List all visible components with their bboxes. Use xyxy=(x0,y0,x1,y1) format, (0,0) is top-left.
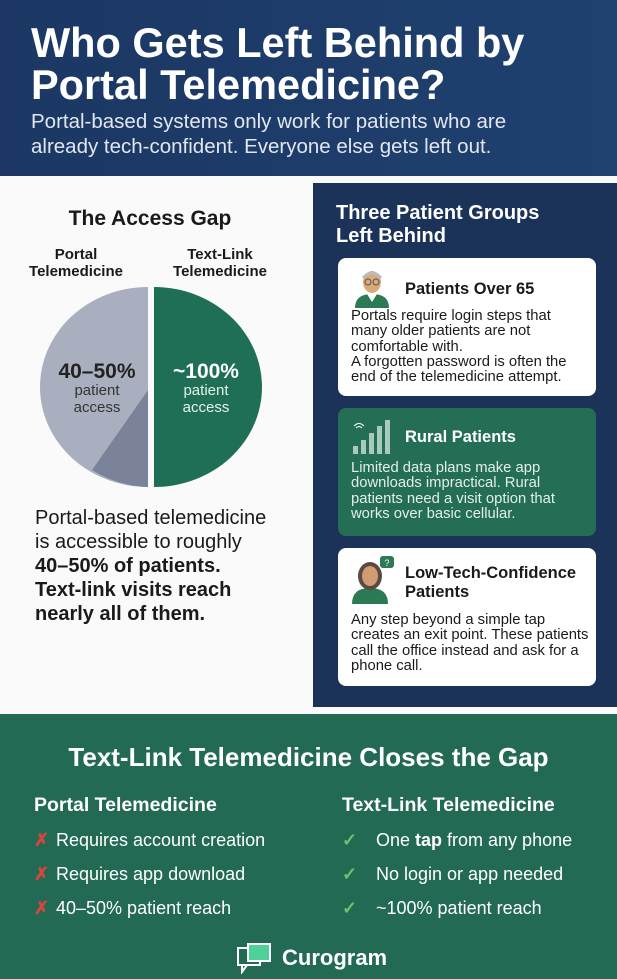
pie chart: access xyxy=(183,399,229,416)
text: over 65: Portals require login steps that xyxy=(351,308,551,324)
panel: closes the gap xyxy=(0,714,617,979)
card: low-tech xyxy=(338,548,596,686)
text: over 65: A forgotten password is often the xyxy=(351,354,567,370)
heading: over 65: Patients Over 65 xyxy=(405,280,534,298)
heading: low-tech: Low-Tech-Confidence xyxy=(405,564,576,582)
heading: low-tech: Patients xyxy=(405,583,469,601)
text: over 65 xyxy=(351,308,567,385)
text: over 65: many older patients are not xyxy=(351,323,530,339)
pie chart xyxy=(40,287,262,487)
column: text-link: ✓ xyxy=(342,830,357,850)
pie chart: patient xyxy=(183,382,229,399)
logo: curogram: Curogram xyxy=(282,945,387,970)
title: Who Gets Left Behind by xyxy=(31,19,524,66)
column: text-link: ~100% patient reach xyxy=(376,898,542,918)
icon: older man xyxy=(355,271,389,308)
column: portal: Requires account creation xyxy=(56,830,265,850)
card: rural xyxy=(338,408,596,536)
pie chart: 40–50% xyxy=(58,360,136,383)
summary text: is accessible to roughly xyxy=(35,531,242,553)
column: text-link: ✓ xyxy=(342,898,357,918)
heading: low-tech xyxy=(405,564,576,601)
pie chart: patient xyxy=(74,382,120,399)
text: rural: works over basic cellular. xyxy=(351,506,515,522)
panel: access gap xyxy=(29,207,267,625)
title xyxy=(31,19,524,108)
summary text xyxy=(35,507,266,625)
label: text-link xyxy=(173,246,267,280)
text: low-tech: creates an exit point. These patients xyxy=(351,627,588,643)
subtitle: Portal-based systems only work for patients who are xyxy=(31,110,506,133)
summary text: Portal-based telemedicine xyxy=(35,507,266,529)
icon: signal bars xyxy=(353,420,390,454)
text: rural: Limited data plans make app xyxy=(351,460,540,476)
column: text-link: ✓ xyxy=(342,864,357,884)
pie chart: ~100% xyxy=(173,360,239,383)
text: rural xyxy=(351,460,555,522)
icon: woman with question: ? xyxy=(384,558,390,568)
column: portal: ✗ xyxy=(34,898,49,918)
heading: groups: Three Patient Groups xyxy=(336,202,539,224)
text: over 65: comfortable with. xyxy=(351,339,463,355)
text: low-tech: Any step beyond a simple tap xyxy=(351,612,545,628)
text: rural: downloads impractical. Rural xyxy=(351,475,540,491)
text: low-tech xyxy=(351,612,588,674)
heading: closes gap: Text-Link Telemedicine Closes the Gap xyxy=(68,742,549,772)
column: text-link: No login or app needed xyxy=(376,864,563,884)
heading: portal column: Portal Telemedicine xyxy=(34,794,217,816)
column: portal: Requires app download xyxy=(56,864,245,884)
subtitle: already tech-confident. Everyone else gets left out. xyxy=(31,135,491,158)
summary text: 40–50% of patients. xyxy=(35,555,221,577)
label: portal xyxy=(29,246,123,280)
label: text-link: Text-Link xyxy=(187,246,253,263)
heading: groups xyxy=(336,202,539,247)
text: low-tech: call the office instead and ask for a xyxy=(351,643,579,659)
label: portal: Portal xyxy=(55,246,97,263)
heading: access gap: The Access Gap xyxy=(69,207,231,230)
text: low-tech: phone call. xyxy=(351,658,423,674)
logo: curogram xyxy=(237,943,387,974)
text: rural: patients need a visit option that xyxy=(351,491,555,507)
heading: text-link column: Text-Link Telemedicine xyxy=(342,794,555,816)
pie chart: access xyxy=(74,399,120,416)
heading: groups: Left Behind xyxy=(336,225,446,247)
title: Portal Telemedicine? xyxy=(31,61,445,108)
column: portal: ✗ xyxy=(34,864,49,884)
icon: woman with question xyxy=(352,556,394,604)
column: text-link: One tap from any phone xyxy=(376,830,572,850)
text: over 65: end of the telemedicine attempt. xyxy=(351,369,562,385)
summary text: Text-link visits reach xyxy=(35,579,231,601)
header band xyxy=(0,0,617,176)
label: portal: Telemedicine xyxy=(29,263,123,280)
summary text: nearly all of them. xyxy=(35,603,205,625)
heading: rural: Rural Patients xyxy=(405,428,516,446)
card: over 65 xyxy=(338,258,596,396)
label: text-link: Telemedicine xyxy=(173,263,267,280)
subtitle xyxy=(31,110,506,158)
column: portal xyxy=(34,794,265,918)
column: portal: ✗ xyxy=(34,830,49,850)
column: portal: 40–50% patient reach xyxy=(56,898,231,918)
column: text-link xyxy=(342,794,572,918)
panel: three groups xyxy=(313,183,617,707)
